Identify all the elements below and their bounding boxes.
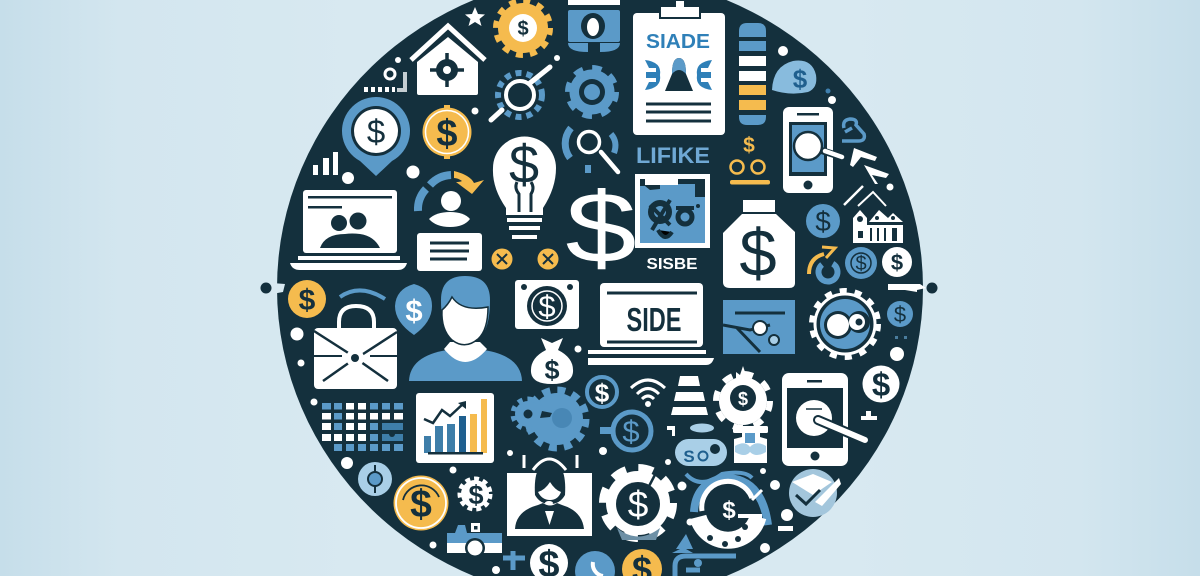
icon: yellow cross badges xyxy=(492,248,558,270)
white bar right xyxy=(888,284,926,292)
icon: blue drop: $ xyxy=(405,293,423,328)
icon: blue coin bottom xyxy=(575,551,615,576)
icon: blue dollar coin: $ xyxy=(815,206,831,237)
icon: white pointer arrows xyxy=(844,148,894,206)
icon: striped cone xyxy=(671,376,708,415)
icon: small ring and row xyxy=(364,57,405,90)
icon: segmented capsule xyxy=(739,23,766,125)
icon: large gear with blob xyxy=(812,291,878,357)
icon: pill with symbols xyxy=(667,424,727,466)
icon: white coin right: $ xyxy=(872,366,890,403)
icon: blue coin with symbol xyxy=(845,247,877,279)
icon: partial gear magnifier xyxy=(565,128,618,173)
icon: blue gear xyxy=(568,68,616,116)
icon: light target xyxy=(358,462,392,496)
small dots bottom centre xyxy=(599,447,793,553)
dots right xyxy=(890,336,907,361)
icon: light bulb with dollar: $ xyxy=(509,135,539,195)
icon: blue coin right xyxy=(887,301,913,327)
icon: small white gear xyxy=(460,478,490,510)
icon: blue branching arrows xyxy=(672,534,736,576)
icon: blue coin right: $ xyxy=(894,302,906,327)
icon: white gear with coin: $ xyxy=(738,389,748,409)
icon: piggy blob: $ xyxy=(793,64,808,94)
icon: person bust xyxy=(409,276,522,381)
icon: yellow coins stack xyxy=(730,134,770,184)
icon: portrait card xyxy=(507,455,592,536)
clipboard panel xyxy=(633,0,725,135)
icon: money square xyxy=(515,280,579,329)
icon: tablet with stylus xyxy=(782,373,865,466)
icon: briefcase envelope xyxy=(314,290,397,389)
icon: magnifier gear xyxy=(491,55,560,120)
icon: yellow gear coin: $ xyxy=(517,18,529,40)
icon: water jar xyxy=(733,426,768,463)
icon: blue and white circular gear: $ xyxy=(722,497,736,524)
icon: blue coin with symbol: $ xyxy=(855,253,867,275)
icon: yellow coin left: $ xyxy=(299,284,316,317)
icon: blue ring coin xyxy=(587,377,617,408)
icon: blue double gear xyxy=(513,390,586,448)
panel: blue map xyxy=(723,300,795,354)
icon: buildings xyxy=(853,210,903,243)
icon: bar signal xyxy=(313,152,420,184)
icon: money bag: $ xyxy=(739,216,777,291)
icon: house with target xyxy=(411,26,485,95)
icon: white coin: $ xyxy=(891,250,903,275)
icon: blue pin with dollar xyxy=(342,97,410,176)
dark circle panel xyxy=(260,0,938,576)
icon: blue drop xyxy=(395,284,432,335)
icon: money square: $ xyxy=(538,289,556,324)
icon: calendar grid xyxy=(322,403,403,451)
icon: white coin xyxy=(882,247,912,277)
icon: blue pin with dollar: $ xyxy=(367,113,385,150)
icon: light bulb with dollar xyxy=(493,135,556,237)
icon: piggy blob xyxy=(772,46,836,104)
clipboard emblem xyxy=(645,58,712,91)
icon: laptop with people xyxy=(290,190,407,270)
icon: big yellow coin: $ xyxy=(410,483,432,526)
label: SIDE: SIDE xyxy=(626,301,682,338)
panel: laptop SIDE xyxy=(588,283,714,365)
icon: phone with magnifier xyxy=(783,107,842,193)
icon: star xyxy=(465,7,485,26)
big white dollar: $ xyxy=(565,172,637,284)
icon: blue document with oval xyxy=(568,0,620,52)
icon: gauge with person xyxy=(418,171,484,227)
icon: white gear with dollar xyxy=(603,468,673,540)
icon: blue ring coin: $ xyxy=(595,378,610,408)
clipboard heading: SIADE xyxy=(646,31,710,53)
icon: yellow coin xyxy=(422,105,478,159)
label: LIFIKE: LIFIKE xyxy=(636,143,710,168)
dots left xyxy=(290,328,582,474)
label: SISBE: SISBE xyxy=(646,256,698,273)
icon: money bag xyxy=(723,200,795,291)
icon: white gear with coin xyxy=(716,366,770,428)
panel: gears picture xyxy=(635,174,710,248)
icon: blue and white circular gear xyxy=(686,473,768,547)
icon: pill with symbols: S xyxy=(683,447,695,466)
icon: big yellow coin xyxy=(394,476,448,530)
icon: blue key coin xyxy=(600,412,651,450)
icon: white coin bottom xyxy=(530,544,568,576)
icon: white coin right xyxy=(861,366,900,420)
icon: money sack xyxy=(531,338,573,385)
icon: small white gear: $ xyxy=(468,480,484,510)
icon: yellow arrow and blue ring xyxy=(809,247,841,285)
chart: growth bars xyxy=(416,393,494,463)
icon: blue plus xyxy=(503,551,525,570)
icon: round envelope check xyxy=(789,469,841,517)
icon: camera xyxy=(430,523,502,574)
icon: yellow gear coin xyxy=(496,1,550,55)
icon: yellow coins stack: $ xyxy=(743,134,755,157)
icon: text card xyxy=(417,233,482,271)
icon: money sack: $ xyxy=(544,355,560,385)
icon: wifi xyxy=(631,380,665,406)
icon: yellow coin bottom xyxy=(622,549,662,576)
icon: yellow coin left xyxy=(288,280,326,318)
icon: blue link xyxy=(842,119,864,141)
icon: blue dollar coin xyxy=(806,204,840,238)
icon: blue key coin: $ xyxy=(622,414,640,449)
icon: white gear with dollar: $ xyxy=(628,484,648,525)
icon: yellow coin: $ xyxy=(436,113,458,155)
